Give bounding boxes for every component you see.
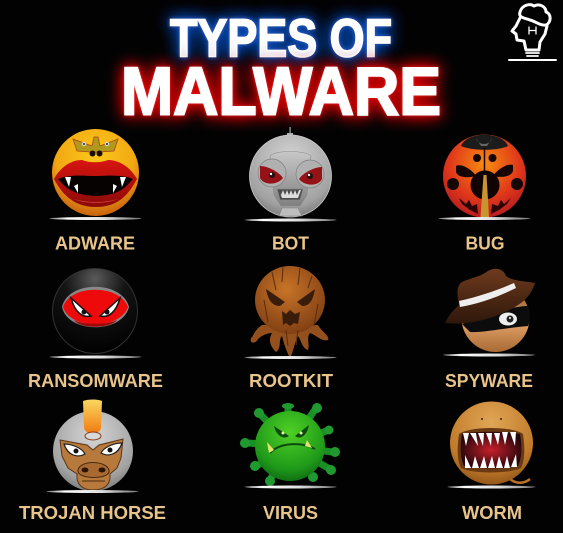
icon: bot face (250, 127, 332, 217)
icon: spyware with hat (445, 269, 535, 352)
icon: virus (240, 403, 340, 486)
label: virus: VIRUS (263, 503, 318, 523)
label: spyware: SPYWARE (445, 371, 533, 391)
label: trojan horse: TROJAN HORSE (19, 503, 166, 523)
icon: ransomware ninja (52, 268, 138, 354)
title line: types of: TYPES OF (170, 8, 392, 68)
icon: trojan horse (53, 400, 133, 491)
shadow line: bot (244, 218, 336, 222)
shadow line: trojan horse (46, 490, 138, 493)
icon: bug ladybird (443, 134, 526, 218)
shadow line: worm (448, 486, 536, 488)
icon: lightbulb head logo (509, 5, 556, 60)
label: worm: WORM (462, 503, 522, 523)
icon: worm (450, 402, 533, 484)
title (121, 8, 441, 130)
shadow line: rootkit (244, 356, 336, 359)
label: bug: BUG (466, 234, 504, 254)
title line: malware: MALWARE (121, 54, 441, 130)
label: rootkit: ROOTKIT (249, 371, 333, 391)
shadow line: virus (244, 486, 336, 488)
label: bot: BOT (272, 234, 309, 254)
shadow line: bug (438, 217, 530, 220)
icon: rootkit wooden face (251, 266, 328, 358)
label: ransomware: RANSOMWARE (28, 371, 163, 391)
label: adware: ADWARE (55, 234, 135, 254)
icon: adware face (52, 129, 139, 216)
shadow line: spyware (443, 354, 535, 356)
shadow line: ransomware (50, 356, 142, 358)
shadow line: adware (50, 217, 142, 220)
